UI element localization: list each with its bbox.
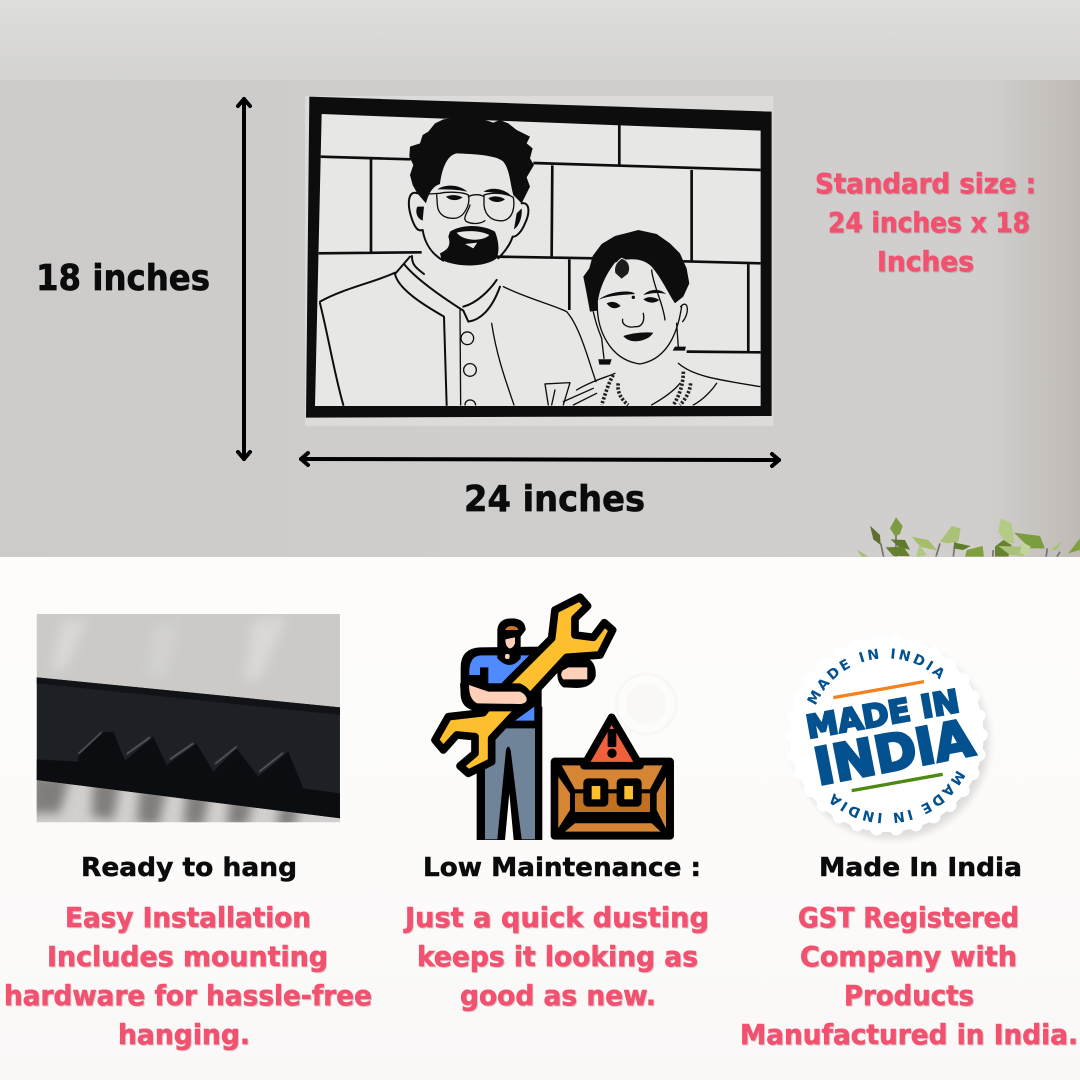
column 3 text: Products xyxy=(844,980,974,1012)
nose xyxy=(465,205,485,224)
size callout text: 24 inches x 18 xyxy=(828,207,1030,239)
lower feature panel xyxy=(0,557,1080,1080)
INDIA wordmark: INDIA xyxy=(809,708,978,797)
woman figure xyxy=(563,230,760,405)
eyebrows and eyes xyxy=(437,186,512,202)
man figure xyxy=(320,117,596,405)
column 3 text xyxy=(740,853,1078,1051)
framed metal portrait photo xyxy=(305,96,773,426)
green rule xyxy=(852,774,943,791)
height dimension arrow xyxy=(238,99,250,459)
column 2 text: Low Maintenance : xyxy=(423,853,701,883)
label: 18 inches: 18 inches xyxy=(36,258,210,299)
width dimension arrow xyxy=(301,453,779,466)
sawtooth hanger xyxy=(37,732,340,818)
size callout text xyxy=(815,168,1036,278)
torso xyxy=(461,647,542,721)
marble wall streaks xyxy=(54,620,281,678)
beard and mouth xyxy=(440,226,498,265)
column 1 text: hardware for hassle-free xyxy=(4,980,372,1012)
badge: Made in India xyxy=(800,648,991,841)
orange rule xyxy=(833,682,924,698)
lower arc text: MADE IN INDIA xyxy=(830,770,966,824)
hands and forearm xyxy=(460,659,596,711)
column 2 text: good as new. xyxy=(460,980,656,1012)
size callout text: Inches xyxy=(877,246,974,278)
column 1 text: Easy Installation xyxy=(65,902,311,934)
column 1 text: Includes mounting xyxy=(47,941,328,973)
glasses xyxy=(428,192,514,221)
legs xyxy=(477,707,542,840)
column 2 text xyxy=(403,853,709,1012)
column 3 text: GST Registered xyxy=(798,902,1019,934)
brick grid lines xyxy=(319,125,761,352)
necklace beads xyxy=(602,372,691,405)
maang tikka xyxy=(615,258,630,279)
column 1 text: Ready to hang xyxy=(81,853,297,883)
column 3 text: Company with xyxy=(800,941,1017,973)
collar and jacket outline xyxy=(320,256,500,405)
plant leaves xyxy=(857,517,1080,558)
wrench xyxy=(435,597,613,773)
head xyxy=(497,618,526,665)
black frame bar xyxy=(37,677,340,818)
warning triangle xyxy=(584,717,640,766)
column 2 text: Just a quick dusting xyxy=(403,902,709,934)
lower blurred shadows xyxy=(36,818,340,822)
column 1 text xyxy=(4,853,372,1051)
photo: mounting hardware detail xyxy=(30,614,340,830)
icon: worker with wrench and toolbox xyxy=(435,597,674,840)
toolbox xyxy=(551,758,674,840)
upper arc text: MADE IN INDIA xyxy=(806,648,944,705)
column 1 text: hanging. xyxy=(118,1019,250,1051)
MADE IN wordmark: MADE IN xyxy=(803,684,962,746)
wall background xyxy=(0,0,1080,557)
size callout text: Standard size : xyxy=(815,168,1036,200)
column 3 text: Made In India xyxy=(819,853,1022,883)
column 2 text: keeps it looking as xyxy=(417,941,698,973)
frame panel background xyxy=(313,113,762,407)
label: 24 inches: 24 inches xyxy=(464,479,645,520)
outer black frame xyxy=(306,97,772,418)
